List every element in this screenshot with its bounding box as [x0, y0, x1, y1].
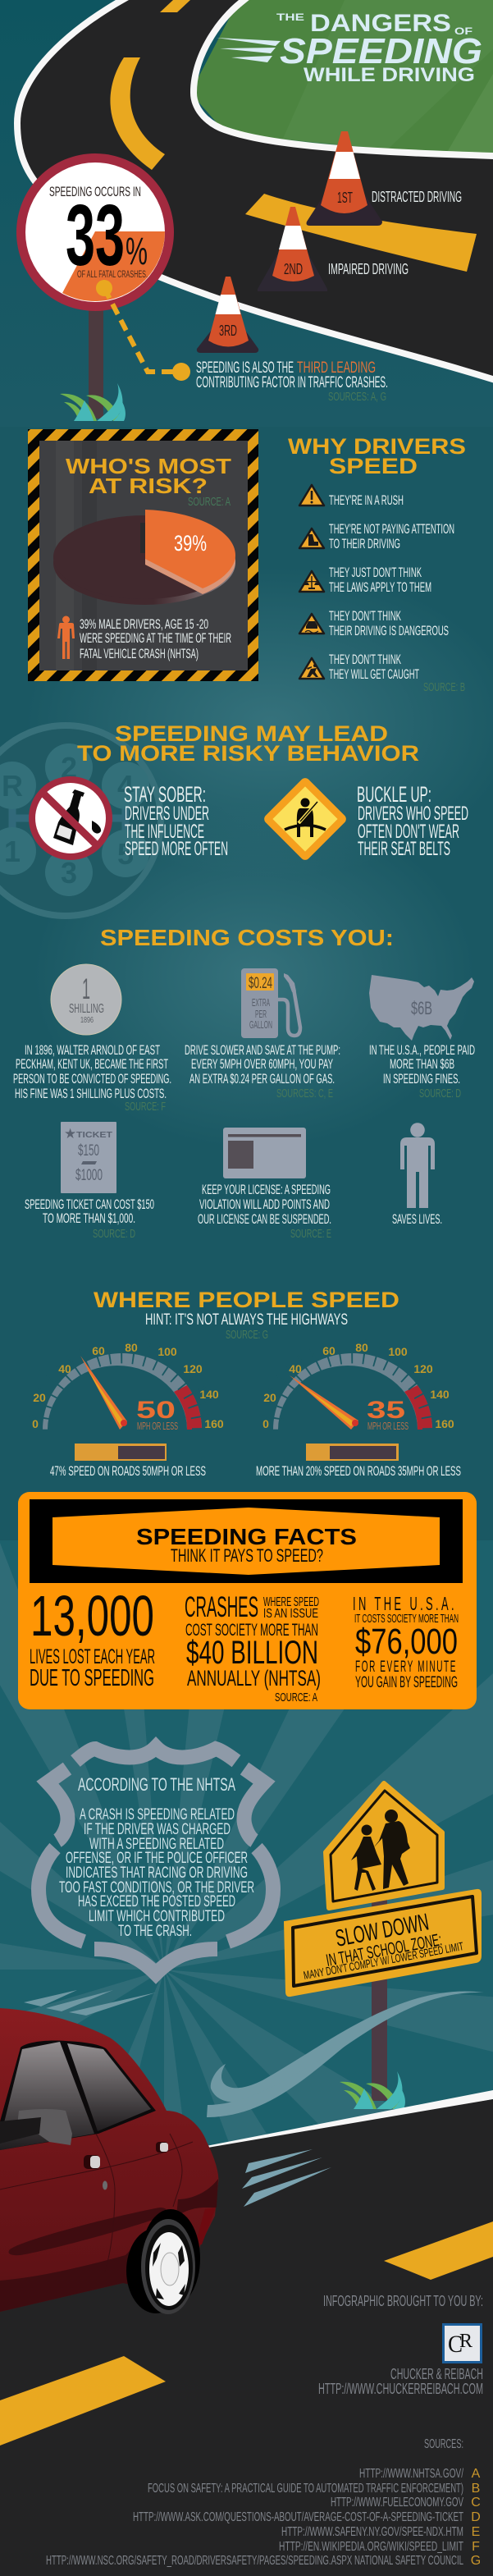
text: third leading factor: [196, 359, 388, 404]
chart: speedometer 50 mph: [32, 1341, 224, 1432]
reason: in a rush: THEY'RE IN A RUSH: [329, 493, 404, 508]
heading: who's most at risk: WHO'S MOST: [66, 454, 231, 478]
text: save at the pump: SOURCES: C, E: [276, 1087, 333, 1100]
icon: gas pump: EXTRA: [252, 996, 270, 1009]
grass infield: [190, 0, 493, 159]
text: keep your license: VIOLATION WILL ADD POINTS AND: [199, 1196, 330, 1212]
icon: gear shift pattern: 5: [117, 837, 134, 871]
icon: ticket: ★: [64, 1126, 76, 1142]
chart: speedometer 50 mph: 140: [199, 1388, 219, 1401]
fact: lives lost: DUE TO SPEEDING: [30, 1665, 154, 1691]
text: male drivers: [80, 617, 231, 661]
icon: ticket: TICKET: [76, 1131, 112, 1140]
icon: ticket: [61, 1122, 116, 1193]
road dashes bottom: [0, 2221, 493, 2446]
reason: laws: [329, 565, 431, 595]
road: [21, 0, 493, 376]
fact: cost to society: COST SOCIETY MORE THAN: [185, 1621, 318, 1640]
fact: cost to society: ANNUALLY (NHTSA): [187, 1666, 321, 1691]
sign: speeding occurs in 33%: SPEEDING OCCURS IN: [49, 184, 141, 199]
icon: speed marks behind car: [242, 2149, 331, 2207]
heading: why drivers speed: SPEED: [329, 454, 418, 478]
sources list: E: [472, 2525, 480, 2539]
fact: cost per minute: $76,000: [355, 1622, 458, 1662]
icon: logo: [443, 2324, 481, 2362]
icon: car wheel: [126, 2209, 200, 2314]
icon: license card: [223, 1128, 306, 1178]
icon: slow down sign: [285, 1890, 481, 1996]
icon: seat belt sign: [262, 776, 348, 862]
sources list: B: [472, 2482, 480, 2496]
icon: gear shift pattern: 4: [117, 769, 134, 803]
icon: slow down sign: SLOW DOWN: [333, 1909, 431, 1952]
road lane dashes: [110, 0, 477, 272]
icon: shield outline: [39, 1747, 273, 1974]
sign: speeding occurs in 33%: [16, 153, 174, 311]
reason: dangerous: THEY DON'T THINK: [329, 609, 401, 624]
heading: where people speed: [94, 1288, 399, 1342]
fact: cost to society: WHERE SPEED: [263, 1595, 319, 1609]
text: stay sober: DRIVERS UNDER: [125, 803, 209, 825]
chart: speedometer 50 mph: 20: [33, 1391, 46, 1404]
text: nhtsa definition: TO THE CRASH.: [118, 1923, 192, 1940]
fact: cost to society: [185, 1591, 321, 1704]
text: nhtsa definition: INDICATES THAT RACING OR DRIVING: [66, 1865, 248, 1882]
text: nhtsa definition: HAS EXCEED THE POSTED SPEED: [78, 1893, 235, 1910]
heading: who's most at risk: [66, 454, 231, 509]
icon: gear shift pattern: [0, 725, 161, 916]
fact: cost to society: $40 BILLION: [186, 1635, 318, 1671]
panel: nhtsa shield: [39, 1747, 273, 1974]
icon: no drinking sign: [29, 776, 112, 860]
chart: speedometer 35 mph: MPH OR LESS: [367, 1421, 409, 1432]
chart: speedometer 50 mph: 60: [92, 1344, 105, 1357]
text: save at the pump: AN EXTRA $0.24 PER GALLON OF GAS.: [189, 1071, 335, 1087]
sign: speeding occurs in 33%: %: [126, 229, 148, 272]
icon: gas pump: [241, 968, 300, 1038]
chart: speedometer 50 mph: 120: [183, 1362, 203, 1375]
text: third leading factor: THIRD LEADING: [297, 359, 376, 377]
icon: us map: $6B: [411, 998, 432, 1018]
text: ticket cost: SPEEDING TICKET CAN COST $150: [25, 1196, 154, 1212]
chart: speedometer 35 mph: [262, 1341, 454, 1432]
icon: ticket: $1000: [75, 1167, 103, 1184]
heading: why drivers speed: WHY DRIVERS: [288, 434, 466, 459]
heading: speeding facts: THINK IT PAYS TO SPEED?: [171, 1545, 323, 1566]
sources list: G: [471, 2554, 481, 2568]
reason: get caught: THEY DON'T THINK: [329, 652, 401, 667]
sources list: [46, 2437, 481, 2568]
icon: grass tuft: [60, 383, 126, 421]
title: WHILE DRIVING: [304, 64, 475, 86]
bar: 20%: [256, 1444, 461, 1479]
heading: where people speed: SOURCE: G: [226, 1328, 268, 1342]
panel: why drivers speed: [288, 434, 466, 694]
title: SPEEDING: [280, 31, 482, 71]
title: OF: [454, 25, 472, 37]
icon: school crossing sign: [326, 1783, 442, 1908]
icon: gas pump: PER: [255, 1008, 267, 1020]
text: save at the pump: [185, 1042, 340, 1100]
panel: who's most at risk: [28, 429, 258, 681]
cone: 2nd impaired driving: IMPAIRED DRIVING: [328, 261, 409, 277]
icon: warning exclamation: [299, 485, 324, 506]
icon: warning figure: [299, 658, 324, 679]
text: buckle up: BUCKLE UP:: [357, 782, 431, 807]
text: male drivers: WERE SPEEDING AT THE TIME OF THEIR: [80, 631, 231, 646]
text: keep your license: KEEP YOUR LICENSE: A SPEEDING: [202, 1182, 331, 1197]
sign post: [89, 308, 103, 419]
callout: dashed connector: [96, 280, 190, 381]
credit: infographic brought to you by: [318, 2293, 483, 2397]
icon: shilling coin: 1: [82, 973, 90, 1005]
cone: 3rd: [197, 277, 258, 353]
icon: speed marks above car: [24, 1990, 156, 2016]
text: save at the pump: EVERY 5MPH OVER 60MPH, YOU PAY: [191, 1056, 333, 1072]
icon: gas pump: GALLON: [249, 1018, 272, 1031]
chart: speedometer 50 mph: 100: [157, 1345, 177, 1358]
heading: who's most at risk: SOURCE: A: [188, 495, 231, 509]
reason: not paying attention: TO THEIR DRIVING: [329, 537, 400, 551]
text: stay sober: SPEED MORE OFTEN: [125, 838, 228, 860]
fact: lives lost: LIVES LOST EACH YEAR: [30, 1645, 155, 1668]
text: shilling fine: SOURCE: F: [125, 1100, 166, 1114]
icon: shilling coin: [51, 964, 121, 1035]
sources list: A: [472, 2467, 481, 2481]
reason: get caught: [329, 652, 465, 694]
text: fines: [369, 1042, 475, 1100]
text: keep your license: OUR LICENSE CAN BE SUSPENDED.: [198, 1211, 331, 1227]
heading: speeding facts: SPEEDING FACTS: [136, 1524, 357, 1549]
text: nhtsa definition: A CRASH IS SPEEDING RELATED: [80, 1806, 235, 1823]
chart: speedometer 35 mph: 120: [413, 1362, 433, 1375]
text: nhtsa definition: WITH A SPEEDING RELATED: [89, 1836, 224, 1853]
icon: logo: R: [459, 2331, 472, 2352]
cone: 3rd: 3RD: [219, 323, 237, 339]
fact: cost to society: IS AN ISSUE: [263, 1607, 318, 1621]
heading: risky behavior: [77, 721, 419, 766]
cone: 2nd impaired driving: [258, 207, 409, 291]
text: fines: SOURCE: D: [419, 1087, 461, 1100]
chart: speedometer 35 mph: 80: [355, 1341, 368, 1354]
heading: where people speed: HINT: IT'S NOT ALWAYS THE HIGHWAYS: [145, 1311, 348, 1329]
text: shilling fine: HIS FINE WAS 1 SHILLING PLUS COSTS.: [15, 1086, 167, 1101]
sign: speeding occurs in 33%: 33: [66, 187, 125, 284]
sources list: D: [471, 2510, 481, 2524]
text: nhtsa definition: [59, 1774, 254, 1940]
text: male drivers: FATAL VEHICLE CRASH (NHTSA): [80, 647, 199, 661]
text: nhtsa definition: TOO FAST CONDITIONS, OR THE DRIVER: [59, 1879, 254, 1897]
icon: ticket: $150: [78, 1142, 99, 1160]
heading: why drivers speed: [288, 434, 466, 478]
icon: warning skidding car: [299, 614, 324, 634]
heading: speeding costs you: SPEEDING COSTS YOU:: [100, 925, 394, 950]
icon: person: [400, 1123, 435, 1208]
text: third leading factor: SPEEDING IS ALSO THE: [196, 359, 294, 377]
chart: speedometer 35 mph: 0: [262, 1417, 269, 1430]
text: ticket cost: TO MORE THAN $1,000.: [43, 1210, 135, 1226]
chart: speedometer 50 mph: 40: [58, 1362, 71, 1375]
reason: laws: THEY JUST DON'T THINK: [329, 565, 422, 580]
icon: gear shift pattern: R: [2, 769, 23, 803]
fact: cost to society: SOURCE: A: [275, 1691, 317, 1704]
icon: gear shift pattern: 2: [61, 751, 77, 785]
heading: speeding facts: [136, 1524, 357, 1566]
chart: speedometer 50 mph: 50: [136, 1397, 176, 1424]
chart: speedometer 35 mph: 20: [263, 1391, 276, 1404]
icon: warning scales: [299, 571, 324, 592]
heading: where people speed: WHERE PEOPLE SPEED: [94, 1288, 399, 1312]
text: third leading factor: SOURCES: A, G: [328, 390, 386, 404]
bar: 47%: 47% SPEED ON ROADS 50MPH OR LESS: [50, 1463, 206, 1479]
heading: who's most at risk: AT RISK?: [89, 474, 208, 498]
reason: not paying attention: [329, 522, 454, 551]
icon: swoosh: [207, 1992, 484, 2117]
sources list: SOURCES:: [424, 2437, 463, 2451]
icon: gear shift pattern: 3: [61, 856, 77, 890]
text: ticket cost: SOURCE: D: [93, 1227, 135, 1241]
text: ticket cost: [25, 1196, 154, 1241]
chart: speedometer 50 mph: 0: [32, 1417, 39, 1430]
text: buckle up: [357, 782, 468, 860]
cone: 2nd impaired driving: 2ND: [284, 261, 303, 277]
text: stay sober: THE INFLUENCE: [125, 821, 204, 843]
text: shilling fine: PECKHAM, KENT UK, BECAME THE FIRST: [16, 1056, 168, 1072]
cone: 1st distracted driving: [307, 131, 462, 226]
sign post: school zone: [372, 1896, 387, 2101]
icon: logo: C: [448, 2331, 463, 2358]
title: [217, 10, 482, 86]
text: nhtsa definition: LIMIT WHICH CONTRIBUTED: [89, 1908, 225, 1925]
icon: gear shift pattern: 1: [4, 835, 21, 868]
heading: risky behavior: TO MORE RISKY BEHAVIOR: [77, 741, 419, 766]
text: nhtsa definition: IF THE DRIVER WAS CHARGED: [84, 1821, 231, 1838]
chart: speedometer 50 mph: 80: [125, 1341, 138, 1354]
icon: warning distracted: [299, 528, 324, 548]
icon: shilling coin: 1896: [80, 1016, 94, 1025]
chart: speedometer 35 mph: 60: [322, 1344, 336, 1357]
chart: speedometer 35 mph: 35: [367, 1397, 405, 1424]
reason: get caught: THEY WILL GET CAUGHT: [329, 667, 419, 682]
icon: red car: [0, 2008, 218, 2314]
fact: cost to society: CRASHES: [185, 1591, 258, 1623]
text: nhtsa definition: OFFENSE, OR IF THE POLICE OFFICER: [66, 1850, 248, 1867]
reason: get caught: SOURCE: B: [423, 680, 465, 694]
cone: 1st distracted driving: 1ST: [337, 190, 353, 206]
text: nhtsa definition: ACCORDING TO THE NHTSA: [78, 1774, 235, 1795]
text: stay sober: [124, 782, 228, 860]
icon: male driver: [57, 615, 75, 659]
text: saves lives: SAVES LIVES.: [392, 1211, 442, 1227]
title: THE: [276, 11, 304, 23]
chart: speedometer 35 mph: 160: [435, 1417, 454, 1430]
text: keep your license: [198, 1182, 331, 1241]
text: shilling fine: PERSON TO BE CONVICTED OF SPEEDING.: [13, 1071, 171, 1087]
chart: speedometer 50 mph: MPH OR LESS: [137, 1421, 178, 1432]
fact: lives lost: 13,000: [30, 1584, 154, 1648]
text: shilling fine: IN 1896, WALTER ARNOLD OF EAST: [25, 1042, 160, 1058]
heading: risky behavior: SPEEDING MAY LEAD: [115, 721, 388, 746]
title: DANGERS: [310, 10, 451, 37]
text: shilling fine: [13, 1042, 171, 1114]
reason: dangerous: [329, 609, 449, 638]
text: save at the pump: DRIVE SLOWER AND SAVE AT THE PUMP:: [185, 1042, 340, 1058]
road bottom: [0, 2090, 493, 2576]
fact: lives lost: [30, 1584, 155, 1691]
icon: gas pump: $0.24: [249, 975, 272, 992]
text: keep your license: SOURCE: E: [290, 1227, 331, 1241]
bar: 47%: [50, 1444, 206, 1479]
chart: speedometer 50 mph: 160: [204, 1417, 224, 1430]
icon: grass tuft two: [340, 2071, 405, 2109]
panel: speeding facts: [18, 1492, 477, 1709]
sources list: C: [471, 2496, 481, 2510]
icon: shilling coin: SHILLING: [69, 1002, 104, 1016]
text: stay sober: STAY SOBER:: [124, 782, 206, 807]
pie chart: 39%: [53, 510, 235, 605]
sources list: F: [472, 2540, 480, 2554]
pie chart: 39%: 39%: [174, 531, 207, 556]
chart: speedometer 35 mph: 140: [430, 1388, 450, 1401]
icon: us map: [369, 975, 474, 1041]
chart: speedometer 35 mph: 40: [289, 1362, 302, 1375]
chart: speedometer 35 mph: 100: [388, 1345, 408, 1358]
sign: speeding occurs in 33%: OF ALL FATAL CRASHES.: [77, 270, 148, 280]
fact: cost per minute: [353, 1593, 459, 1691]
text: male drivers: 39% MALE DRIVERS, AGE 15 -20: [80, 617, 208, 632]
